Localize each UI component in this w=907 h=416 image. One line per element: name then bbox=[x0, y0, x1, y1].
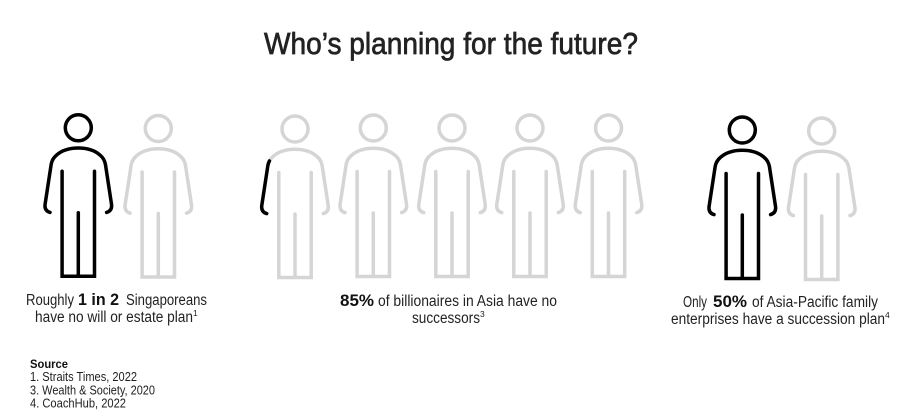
caption: 85%: 3 bbox=[480, 309, 485, 319]
caption: 50%: 4 bbox=[885, 310, 890, 320]
caption: 50%: enterprises have a succession plan bbox=[671, 311, 885, 328]
caption: 50%: Only bbox=[683, 294, 707, 311]
icon: grey person 2 bbox=[340, 115, 407, 276]
caption: 1 in 2: 1 in 2 bbox=[78, 291, 119, 309]
icon: grey person bbox=[125, 116, 192, 277]
caption: 1 in 2 bbox=[26, 291, 207, 326]
icon: grey person 3 bbox=[419, 115, 485, 276]
caption: 85%: 85% bbox=[340, 292, 374, 310]
icon: partly black person bbox=[262, 116, 328, 278]
icon: black person bbox=[709, 117, 776, 278]
source list: 1. Straits Times, 2022 bbox=[30, 370, 137, 384]
caption: 85% bbox=[340, 292, 557, 327]
caption: 85%: of billionaires in Asia have no bbox=[378, 293, 557, 310]
caption: 1 in 2: have no will or estate plan bbox=[35, 309, 193, 326]
icon: grey person bbox=[788, 118, 855, 280]
source list: 4. CoachHub, 2022 bbox=[30, 396, 126, 410]
icon: grey person 4 bbox=[497, 115, 563, 276]
source list: 3. Wealth & Society, 2020 bbox=[30, 384, 155, 398]
caption: 1 in 2: 1 bbox=[193, 308, 198, 318]
panel: Singaporeans without estate plans bbox=[26, 115, 207, 326]
panel: billionaires without successors bbox=[262, 115, 642, 327]
source list: Source bbox=[30, 357, 68, 371]
caption: 85%: successors bbox=[412, 310, 480, 327]
caption: 1 in 2: Singaporeans bbox=[126, 292, 207, 309]
caption: 50%: 50% bbox=[713, 293, 747, 311]
caption: 50%: of Asia-Pacific family bbox=[752, 294, 878, 311]
title: Who’s planning for the future? bbox=[264, 26, 638, 61]
icon: grey person 5 bbox=[575, 115, 642, 276]
icon: black person bbox=[45, 115, 112, 276]
caption: 1 in 2: Roughly bbox=[26, 292, 74, 309]
caption: 50% bbox=[671, 293, 890, 328]
source list bbox=[30, 357, 155, 410]
panel: family enterprises with succession plans bbox=[671, 117, 890, 328]
